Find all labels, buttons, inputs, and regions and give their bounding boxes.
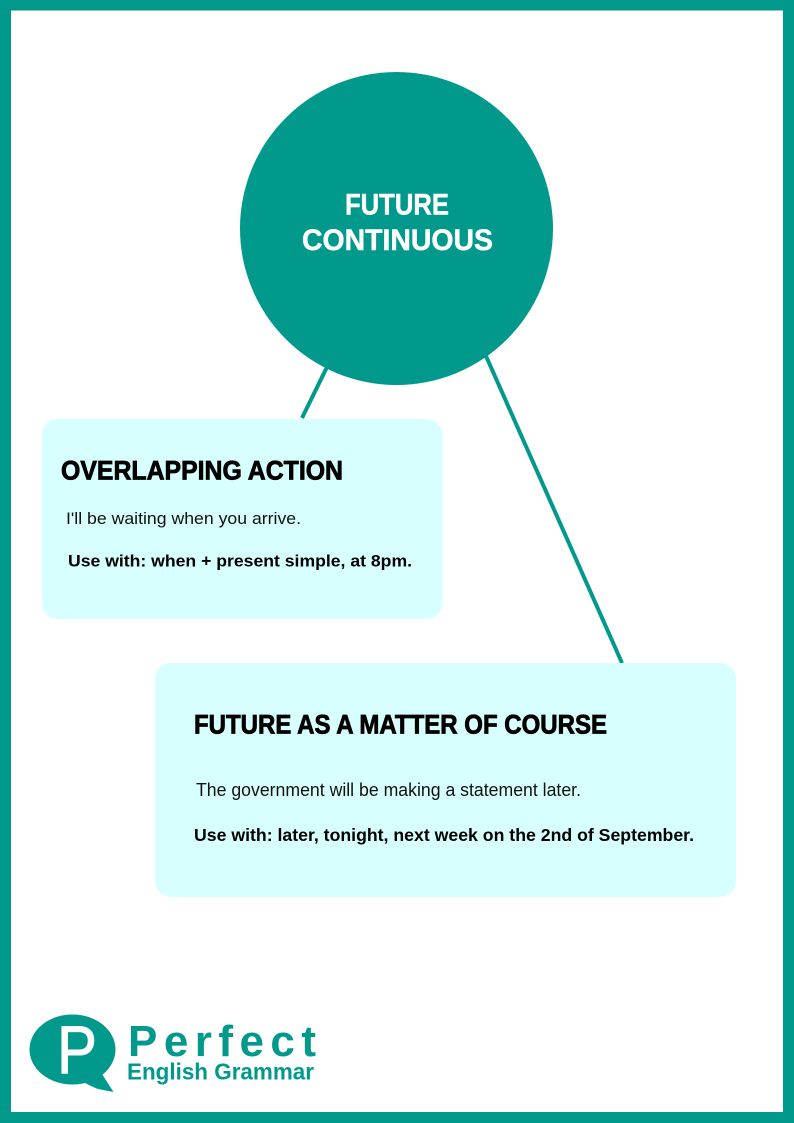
title: CONTINUOUS <box>302 224 493 257</box>
icon: speech bubble with P <box>30 1012 116 1092</box>
logo wordmark: Perfect <box>128 1017 316 1066</box>
panel heading: future as a matter of course: FUTURE AS A MATTER OF COURSE <box>194 710 607 740</box>
logo: Perfect English Grammar <box>30 1012 316 1092</box>
usage note: Use with: when + present simple, at 8pm. <box>68 552 412 570</box>
title <box>302 188 493 257</box>
icon: speech bubble with P: P <box>57 1012 97 1088</box>
connector line to future as a matter of course panel <box>486 356 622 663</box>
usage note: Use with: later, tonight, next week on the 2nd of September. <box>194 825 694 845</box>
panel heading: overlapping action: OVERLAPPING ACTION <box>61 456 343 486</box>
example sentence: The government will be making a statement later. <box>196 780 581 800</box>
example sentence: I'll be waiting when you arrive. <box>66 509 301 528</box>
title circle <box>240 72 553 385</box>
connector line to overlapping action panel <box>302 367 327 418</box>
logo tagline: English Grammar <box>127 1058 314 1084</box>
panel: overlapping action <box>42 419 442 619</box>
title: FUTURE <box>345 188 449 222</box>
panel: future as a matter of course <box>155 663 736 897</box>
